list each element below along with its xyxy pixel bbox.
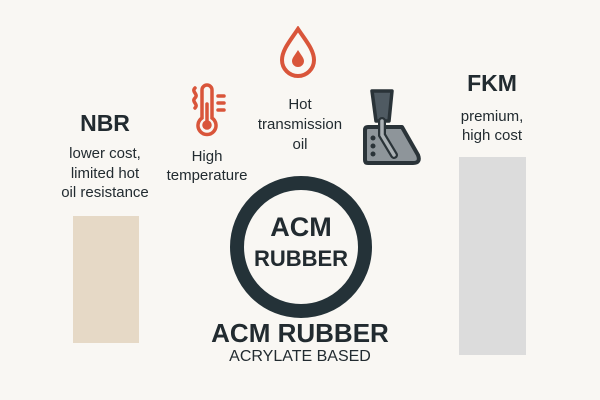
ring label: RUBBER — [254, 246, 348, 271]
label: hot transmission oil: oil — [292, 136, 308, 153]
icon: oil drop — [280, 26, 316, 78]
label: high temperature: High — [192, 148, 222, 165]
title: ACM RUBBER: ACM RUBBER — [211, 318, 389, 348]
label: hot transmission oil: Hot — [288, 96, 312, 113]
FKM bar — [459, 157, 526, 355]
NBR description: lower cost, — [69, 145, 141, 162]
NBR heading: NBR — [80, 110, 130, 136]
NBR description: oil resistance — [61, 184, 149, 201]
FKM description — [461, 108, 523, 144]
icon: gear shifter — [363, 89, 421, 165]
label: hot transmission oil — [258, 96, 342, 153]
ring label: ACM — [270, 212, 332, 242]
NBR description — [61, 145, 149, 201]
NBR bar — [73, 216, 139, 343]
label: high temperature — [166, 148, 247, 184]
FKM heading: FKM — [467, 70, 517, 96]
icon: thermometer — [192, 83, 226, 136]
FKM description: high cost — [462, 127, 522, 144]
NBR description: limited hot — [71, 164, 139, 182]
FKM description: premium, — [461, 108, 523, 125]
label: high temperature: temperature — [167, 167, 247, 184]
subtitle: ACRYLATE BASED — [229, 348, 371, 365]
ring label — [254, 212, 348, 271]
ring: ACM rubber — [230, 176, 372, 318]
label: hot transmission oil: transmission — [258, 116, 342, 133]
